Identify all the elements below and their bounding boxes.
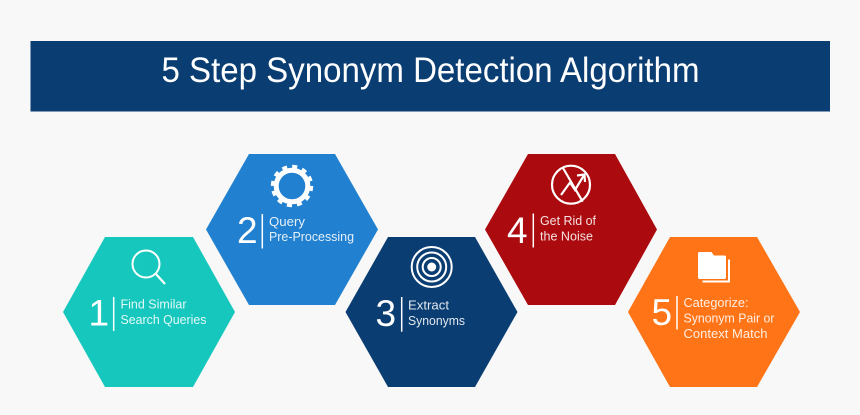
step 3 hexagon: extract synonyms [346,237,518,387]
step number 5: 5 [652,292,672,333]
step 2 label: Pre-Processing [269,229,354,244]
step 5 label: Synonym Pair or [684,310,775,326]
step 1 label: Find Similar [120,296,187,312]
step 5 label: Context Match [684,326,768,341]
step number 4: 4 [507,210,528,251]
step 1 label: Search Queries [120,312,207,327]
step number 3: 3 [376,293,396,334]
step 2 hexagon: query pre-processing [206,154,378,305]
step number 2: 2 [237,210,258,251]
title banner [30,41,830,112]
step 2 label: Query [269,214,306,229]
step 1 hexagon: find similar search queries [63,237,235,387]
title: 5 Step Synonym Detection Algorithm [162,51,700,90]
step 3 label: Extract [408,298,449,312]
step 5 hexagon: categorize [628,237,800,387]
step 5 label: Categorize: [684,295,748,310]
step 4 label: Get Rid of [540,213,596,228]
icon: folders [698,252,729,282]
icon: no noise sign [552,166,590,204]
icon: magnifying glass [132,250,165,284]
step 3 label: Synonyms [408,313,465,328]
step 4 hexagon: get rid of the noise [485,154,657,305]
icon: gear [273,167,311,205]
step number 1: 1 [88,292,109,334]
icon: concentric target [412,247,452,287]
step 4 label: the Noise [540,228,593,244]
